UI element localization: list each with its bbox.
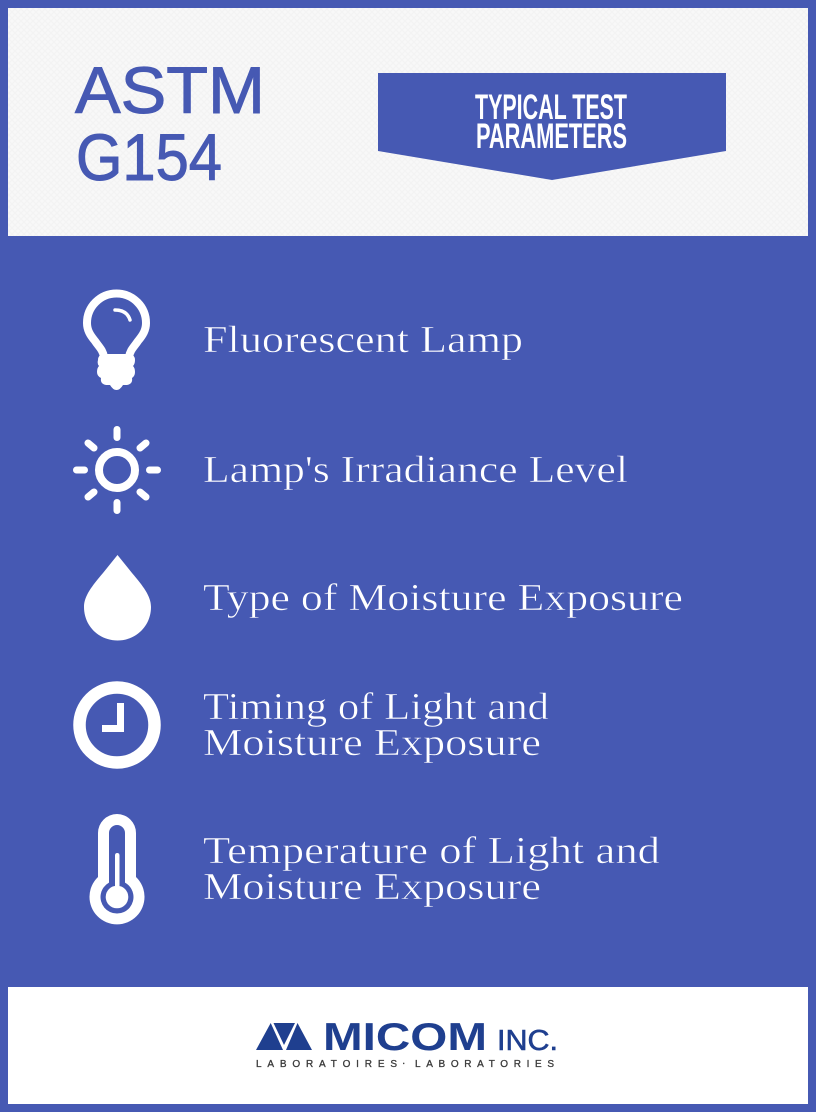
- panel: header: [8, 8, 808, 236]
- text: temperature: Temperature of Light and: [203, 830, 660, 872]
- panel: footer: [8, 987, 808, 1104]
- icon: sun: [76, 430, 158, 510]
- logo wordmark: MICOM: [323, 1016, 487, 1059]
- title: G154: [76, 120, 222, 194]
- logo tagline: LABORATORIES: [415, 1059, 554, 1070]
- text: temperature: Moisture Exposure: [203, 866, 541, 908]
- text: temperature: [203, 830, 660, 908]
- logo wordmark: INC.: [497, 1025, 558, 1057]
- title: ASTM: [75, 53, 265, 127]
- banner: typical test parameters: [378, 73, 726, 180]
- logo tagline: [256, 1058, 554, 1070]
- text: moisture exposure type: Type of Moisture Exposure: [203, 577, 683, 619]
- text: fluorescent lamp: Fluorescent Lamp: [203, 319, 523, 361]
- panel: parameters: [76, 294, 683, 924]
- title: [75, 53, 265, 194]
- icon: thermometer: [89, 814, 144, 924]
- icon: light bulb: [87, 294, 146, 390]
- logo tagline: ·: [402, 1058, 405, 1069]
- logo tagline: LABORATOIRES: [256, 1059, 397, 1070]
- logo: micom inc: [256, 1016, 558, 1070]
- logo wordmark: [323, 1016, 558, 1059]
- icon: water drop: [84, 555, 151, 640]
- text: timing: [203, 686, 549, 764]
- banner: typical test parameters: PARAMETERS: [476, 117, 627, 156]
- banner: typical test parameters: TYPICAL TEST: [475, 88, 627, 127]
- text: timing: Moisture Exposure: [203, 722, 541, 764]
- icon: clock: [80, 688, 154, 762]
- text: timing: Timing of Light and: [203, 686, 549, 728]
- text: irradiance level: Lamp's Irradiance Level: [203, 449, 628, 491]
- logo mark: [256, 1023, 312, 1050]
